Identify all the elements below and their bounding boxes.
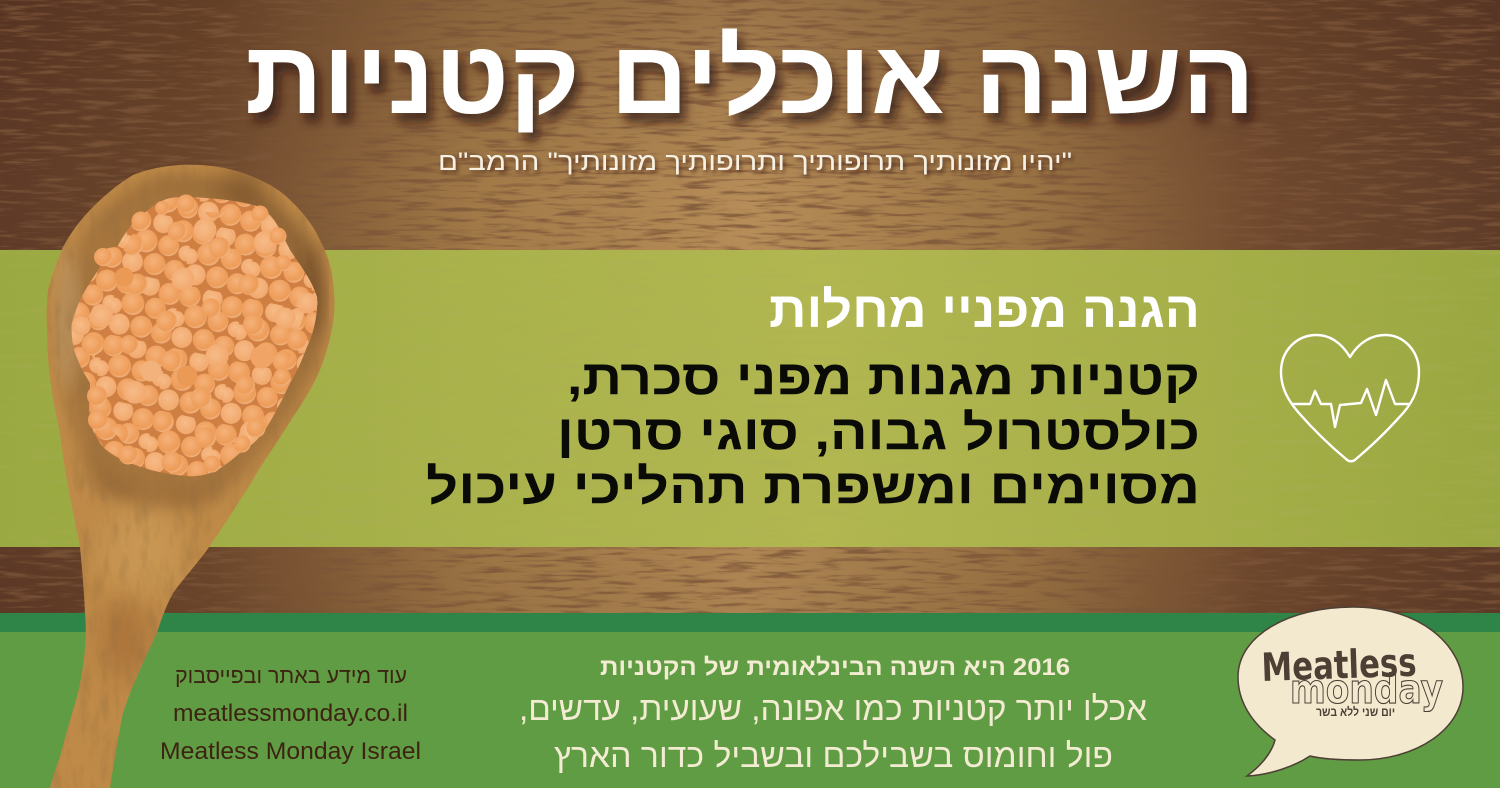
subtitle quote: "יהיו מזונותיך תרופותיך ותרופותיך מזונותיך" הרמב"ם [438, 148, 1072, 176]
footer left: website info [160, 663, 421, 765]
footer line 1: אכלו יותר קטניות כמו אפונה, שעועית, עדשים, [519, 690, 1147, 727]
footer line 2: פול וחומוס בשבילכם ובשביל כדור הארץ [554, 737, 1113, 774]
facebook line: עוד מידע באתר ובפייסבוק [175, 663, 407, 688]
line 1: קטניות מגנות מפני סכרת, [567, 351, 1200, 405]
panel: footer green [0, 613, 1500, 788]
spoon [40, 160, 340, 788]
line 3: מסוימים ומשפרת תהליכי עיכול [426, 460, 1200, 514]
footer center text [519, 654, 1147, 774]
line 2: כולסטרול גבוה, סוגי סרטן [557, 406, 1200, 460]
website: meatlessmonday.co.il [173, 700, 408, 727]
logo tagline: יום שני ללא בשר [1316, 705, 1395, 719]
icon: heart with pulse [1281, 335, 1419, 461]
panel: green band [0, 250, 1500, 547]
logo word: Meatless: Meatless [1261, 641, 1417, 691]
spoon bowl [56, 174, 324, 509]
footer heading: 2016 היא השנה הבינלאומית של הקטניות [600, 654, 1070, 681]
logo word: monday: monday [1290, 667, 1443, 713]
page name: Meatless Monday Israel [160, 738, 421, 765]
body text [426, 351, 1200, 514]
heading: disease protection: הגנה מפניי מחלות [769, 282, 1200, 338]
logo: speech bubble [1238, 607, 1463, 776]
lentils [72, 194, 318, 476]
title: השנה אוכלים קטניות [245, 20, 1255, 136]
